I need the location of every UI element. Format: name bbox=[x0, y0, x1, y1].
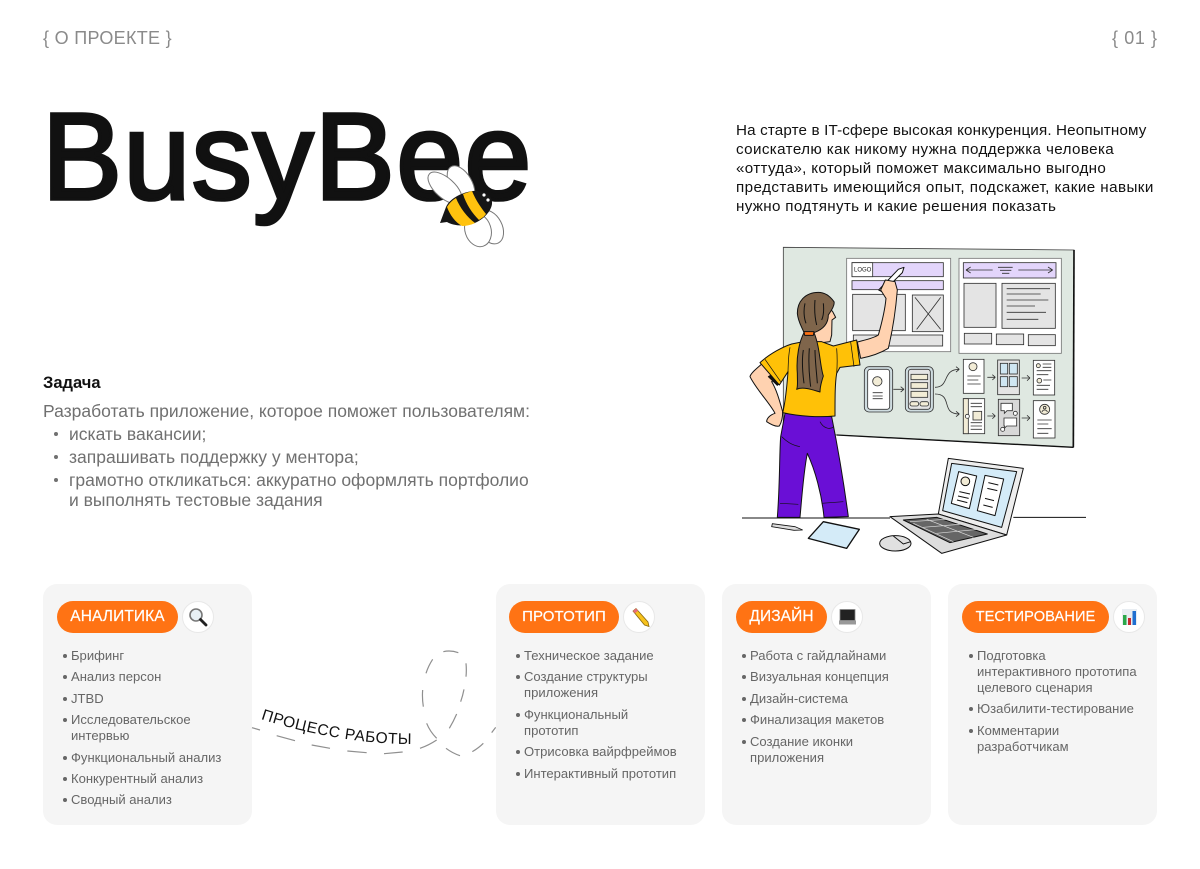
list: тестирование: Подготовка bbox=[977, 648, 1046, 663]
panel: аналитика bbox=[43, 584, 252, 825]
panel: дизайн bbox=[722, 584, 931, 825]
list: аналитика: интервью bbox=[71, 728, 129, 743]
task block bbox=[43, 374, 530, 510]
list: аналитика: Исследовательское bbox=[71, 712, 191, 727]
list: аналитика: Сводный анализ bbox=[71, 792, 172, 807]
pill: дизайн: ДИЗАЙН bbox=[749, 608, 814, 625]
intro paragraph: представить имеющийся опыт, подскажет, какие навыки bbox=[736, 179, 1154, 196]
list: прототип: приложения bbox=[524, 685, 598, 700]
icon: laptop bbox=[831, 601, 863, 633]
task bullets: запрашивать поддержку у ментора; bbox=[69, 447, 359, 467]
list: прототип: Создание структуры bbox=[524, 669, 648, 684]
pill: аналитика bbox=[57, 601, 178, 633]
illustration: woman at wireframe board bbox=[742, 246, 1086, 554]
pill: тестирование: ТЕСТИРОВАНИЕ bbox=[976, 609, 1095, 625]
list: тестирование: Комментарии bbox=[977, 723, 1059, 738]
shirt bbox=[760, 340, 860, 417]
intro paragraph: нужно подтянуть и какие решения показать bbox=[736, 198, 1056, 215]
face and neck bbox=[812, 305, 836, 343]
pill: аналитика: АНАЛИТИКА bbox=[70, 608, 165, 625]
list: тестирование: интерактивного прототипа bbox=[977, 664, 1137, 679]
list: аналитика: Конкурентный анализ bbox=[71, 771, 203, 786]
icon: bar chart bbox=[1113, 601, 1145, 633]
list: аналитика: Функциональный анализ bbox=[71, 750, 221, 765]
woman figure bbox=[750, 267, 904, 517]
pill: дизайн bbox=[736, 601, 827, 633]
task bullets: и выполнять тестовые задания bbox=[69, 490, 323, 510]
task bullets bbox=[54, 424, 529, 510]
pill: тестирование bbox=[962, 601, 1109, 633]
list: дизайн: приложения bbox=[750, 750, 824, 765]
list: прототип: Отрисовка вайрфреймов bbox=[524, 744, 677, 759]
list: дизайн: Визуальная концепция bbox=[750, 669, 889, 684]
wireframe board bbox=[783, 247, 1074, 447]
task bullets: грамотно откликаться: аккуратно оформлять портфолио bbox=[69, 470, 529, 490]
list: тестирование: Юзабилити-тестирование bbox=[977, 701, 1134, 716]
task description: Разработать приложение, которое поможет пользователям: bbox=[43, 401, 530, 421]
pants bbox=[777, 413, 848, 517]
panel: тестирование bbox=[948, 584, 1157, 825]
intro paragraph: соискателю как никому нужна поддержка человека bbox=[736, 141, 1114, 158]
list: аналитика: Брифинг bbox=[71, 648, 124, 663]
laptop bbox=[890, 458, 1023, 553]
list: дизайн: Создание иконки bbox=[750, 734, 853, 749]
process label with dashed path: ПРОЦЕСС РАБОТЫ bbox=[262, 709, 410, 744]
list: тестирование bbox=[969, 648, 1137, 754]
icon: pencil bbox=[623, 601, 655, 633]
title: BusyBee bbox=[42, 88, 533, 226]
raised arm bbox=[857, 280, 897, 358]
elbow shadow bbox=[768, 373, 781, 385]
list: дизайн: Работа с гайдлайнами bbox=[750, 648, 886, 663]
icon: bee bbox=[427, 165, 504, 248]
page number: { 01 } bbox=[1112, 28, 1158, 48]
pencil bbox=[772, 524, 803, 530]
hair bbox=[797, 292, 834, 392]
list: прототип: Техническое задание bbox=[524, 648, 654, 663]
list: прототип: Интерактивный прототип bbox=[524, 766, 676, 781]
pill: прототип bbox=[509, 601, 619, 633]
process label with dashed path bbox=[252, 650, 496, 756]
stylus bbox=[879, 267, 904, 292]
list: прототип: Функциональный bbox=[524, 707, 628, 722]
intro paragraph bbox=[736, 122, 1154, 215]
pill: прототип: ПРОТОТИП bbox=[522, 608, 606, 625]
desk line bbox=[742, 516, 1086, 520]
list: дизайн bbox=[742, 648, 889, 765]
task bullets: искать вакансии; bbox=[69, 424, 206, 444]
intro paragraph: «оттуда», который поможет максимально выгодно bbox=[736, 160, 1106, 177]
list: дизайн: Дизайн-система bbox=[750, 691, 848, 706]
bent arm bbox=[750, 363, 783, 426]
section label: о проекте: { О ПРОЕКТЕ } bbox=[43, 28, 172, 48]
task heading: Задача bbox=[43, 374, 101, 392]
panel: прототип bbox=[496, 584, 705, 825]
intro paragraph: На старте в IT-сфере высокая конкуренция. Неопытному bbox=[736, 122, 1147, 139]
icon: magnifier bbox=[182, 601, 214, 633]
list: тестирование: целевого сценария bbox=[977, 680, 1093, 695]
list: аналитика bbox=[63, 648, 221, 807]
list: аналитика: JTBD bbox=[71, 691, 104, 706]
mouse bbox=[880, 536, 911, 551]
tablet bbox=[808, 522, 859, 548]
list: аналитика: Анализ персон bbox=[71, 669, 161, 684]
list: дизайн: Финализация макетов bbox=[750, 712, 884, 727]
wireframe board: LOGO bbox=[854, 268, 872, 274]
list: тестирование: разработчикам bbox=[977, 739, 1069, 754]
list: прототип: прототип bbox=[524, 723, 578, 738]
list: прототип bbox=[516, 648, 677, 781]
